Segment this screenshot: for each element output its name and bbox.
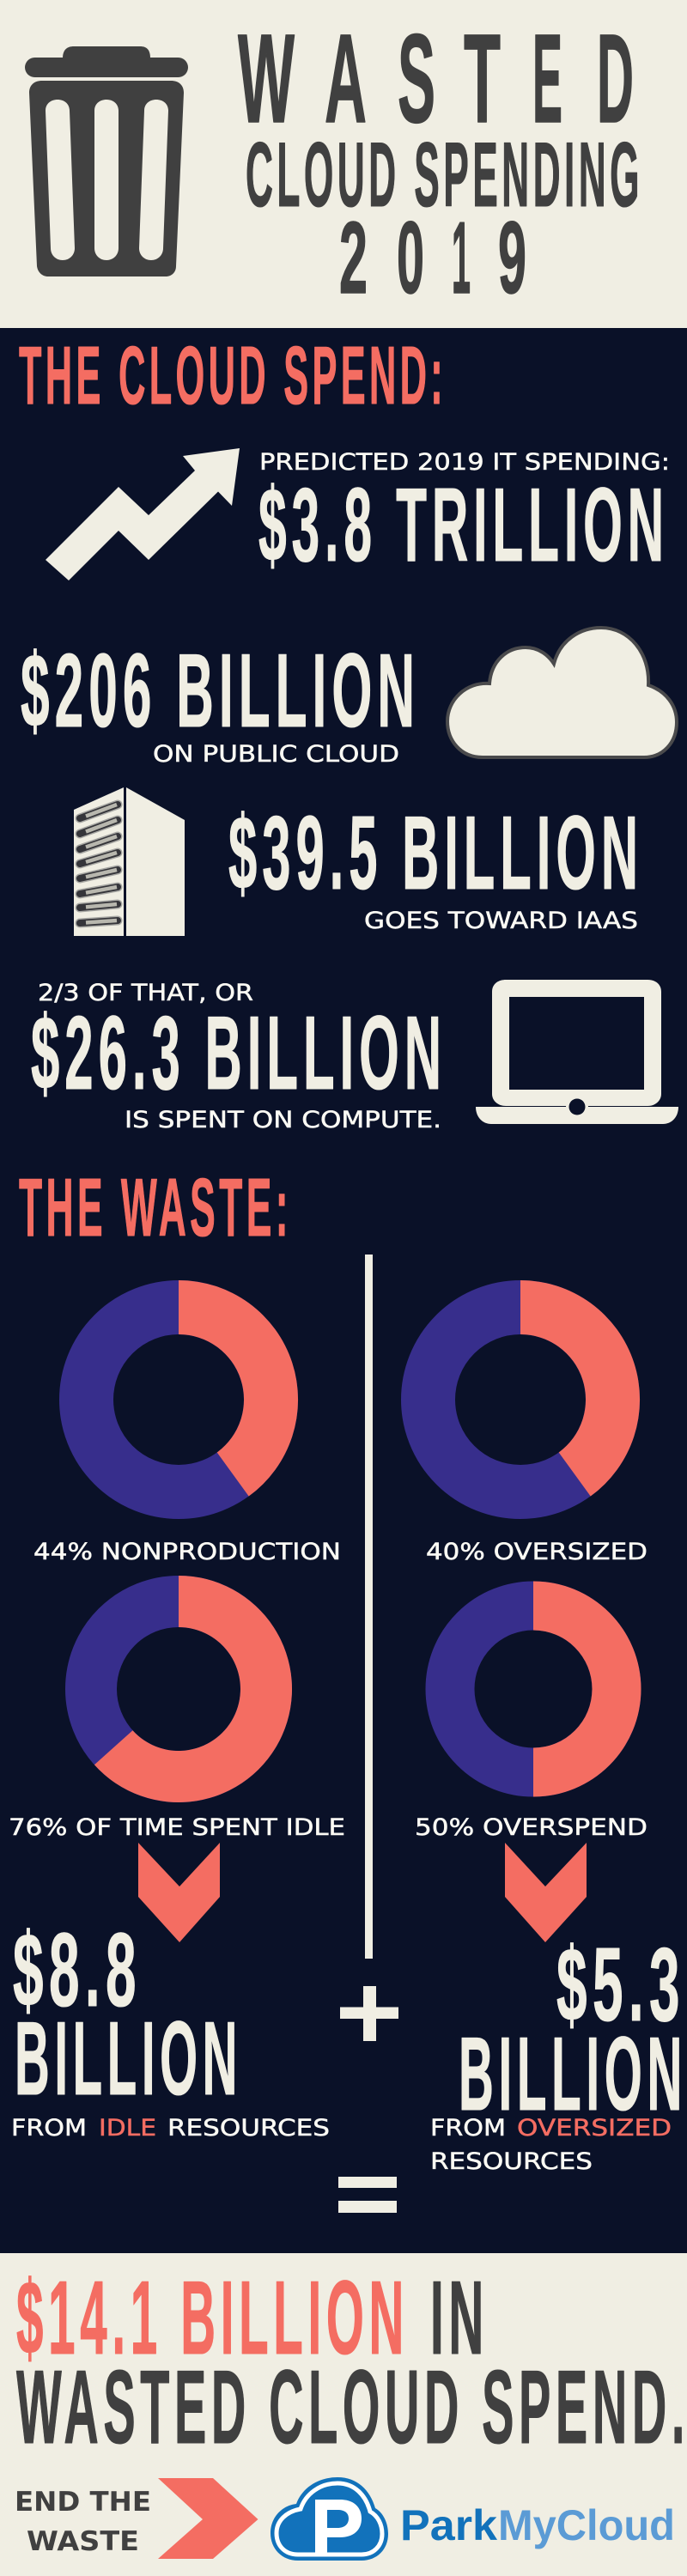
arrow: left chevron <box>138 1843 220 1942</box>
text: from oversized resources <box>430 2115 672 2175</box>
text: spent on compute: IS SPENT ON COMPUTE. <box>125 1107 441 1133</box>
stat: 8.8 billion <box>13 1911 242 2117</box>
logo: parkmycloud wordmark <box>400 2501 675 2549</box>
text: from oversized resources: OVERSIZED <box>517 2115 672 2142</box>
text: from idle resources <box>11 2115 330 2142</box>
label: 76% idle: 76% OF TIME SPENT IDLE <box>9 1814 345 1841</box>
text: on public cloud: ON PUBLIC CLOUD <box>153 741 399 768</box>
divider <box>365 1255 373 1959</box>
logo: parkmycloud wordmark: MyCloud <box>498 2501 675 2549</box>
call to action: end the waste <box>15 2487 151 2557</box>
label: 44% nonproduction: 44% NONPRODUCTION <box>33 1539 341 1565</box>
label: 40% oversized: 40% OVERSIZED <box>426 1539 647 1565</box>
title: wasted: S <box>398 9 435 149</box>
panel: header: D <box>597 9 634 149</box>
panel: conclusion <box>0 2253 687 2576</box>
panel: conclusion: IN <box>430 2259 489 2376</box>
icon: laptop <box>476 980 678 1124</box>
logo: parkmycloud cloud <box>271 2477 388 2561</box>
title: 2019: 1 <box>452 201 471 315</box>
panel: the cloud spend <box>19 330 678 1133</box>
donut chart: 40% oversized <box>428 1280 640 1496</box>
donut chart: 50% overspend <box>450 1582 641 1796</box>
icon: server <box>74 787 185 936</box>
title: wasted: E <box>532 9 562 149</box>
text: from oversized resources: FROM <box>430 2115 506 2142</box>
panel: header <box>0 0 687 328</box>
title: wasted: A <box>325 9 367 149</box>
icon: plus <box>340 1986 398 2041</box>
text: from idle resources: RESOURCES <box>167 2115 330 2142</box>
label: 50% overspend: 50% OVERSPEND <box>415 1814 647 1841</box>
call to action: end the waste: WASTE <box>27 2526 139 2557</box>
icon: rising arrow <box>46 448 240 580</box>
donut chart: 76% idle <box>91 1576 292 1802</box>
title: wasted: W <box>238 9 295 149</box>
icon: cloud <box>447 628 677 757</box>
title: 2019: 0 <box>397 201 424 315</box>
title: wasted: T <box>464 9 501 149</box>
icon: trash can <box>25 46 188 276</box>
text: goes toward iaas: GOES TOWARD IAAS <box>364 908 638 934</box>
text: from oversized resources: RESOURCES <box>430 2148 593 2175</box>
text: predicted it spending: PREDICTED 2019 IT SPENDING: <box>259 449 670 476</box>
stat: 8.8 billion: $8.8 <box>13 1911 142 2028</box>
text: from idle resources: FROM <box>11 2115 87 2142</box>
donut chart: 44% nonproduction <box>86 1280 298 1496</box>
title: 2019: 2 <box>339 201 368 315</box>
arrow: right chevron <box>505 1843 587 1942</box>
call to action: end the waste: END THE <box>15 2487 151 2518</box>
text: two thirds: 2/3 OF THAT, OR <box>38 980 253 1006</box>
panel: the waste: BILLION <box>15 2000 242 2117</box>
panel: header: 9 <box>498 201 526 315</box>
icon: equals <box>338 2177 397 2213</box>
panel: the waste <box>9 1162 687 2213</box>
stat: 5.3 billion <box>459 1926 687 2132</box>
arrow: orange chevron <box>158 2478 258 2559</box>
logo: parkmycloud wordmark: Park <box>400 2501 497 2549</box>
panel: the waste: THE WASTE: <box>19 1162 292 1254</box>
text: from idle resources: IDLE <box>99 2115 156 2142</box>
